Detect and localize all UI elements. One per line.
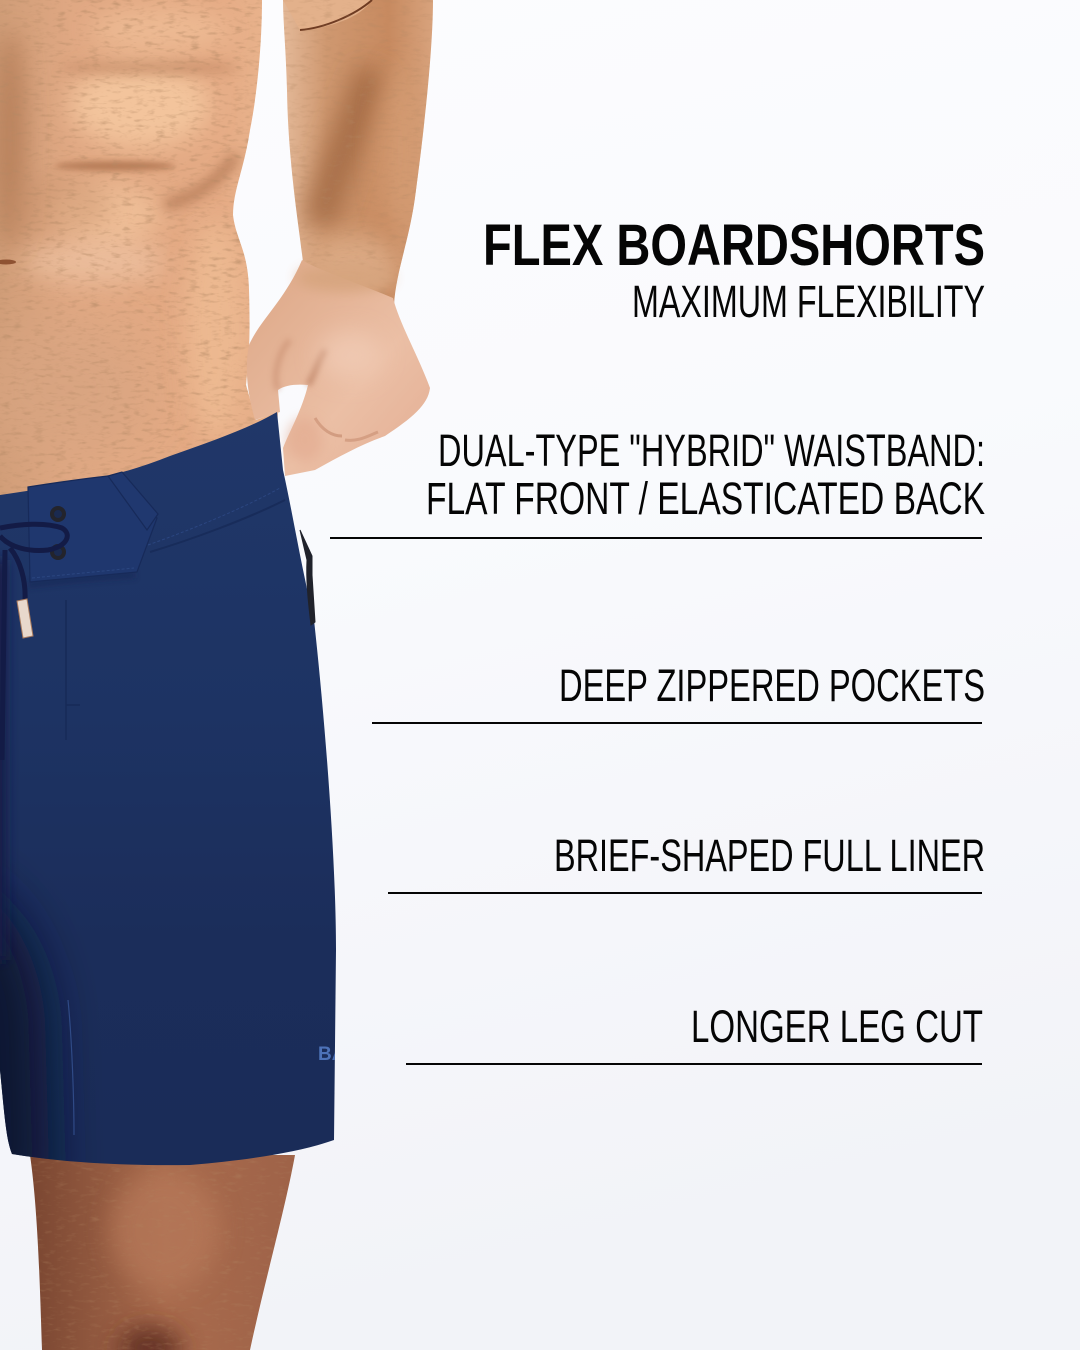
fly placket [66, 600, 80, 740]
hand gripping waistband [247, 260, 430, 476]
photo: model wearing navy boardshorts [0, 0, 435, 1350]
logo on leg: BA [318, 1044, 346, 1065]
drawcord [0, 524, 67, 760]
thigh [30, 1150, 300, 1350]
zipper pull [300, 530, 315, 625]
torso [0, 0, 290, 520]
navy boardshorts [0, 410, 346, 1200]
waistband flap [28, 472, 158, 582]
side seam [68, 1000, 74, 1135]
eyelets [52, 508, 64, 558]
heading [483, 213, 985, 327]
metal cord tip [17, 599, 33, 638]
feature: leg cut: LONGER LEG CUT [691, 1001, 983, 1052]
forearm [283, 0, 433, 303]
feature: hybrid waistband [330, 425, 985, 539]
